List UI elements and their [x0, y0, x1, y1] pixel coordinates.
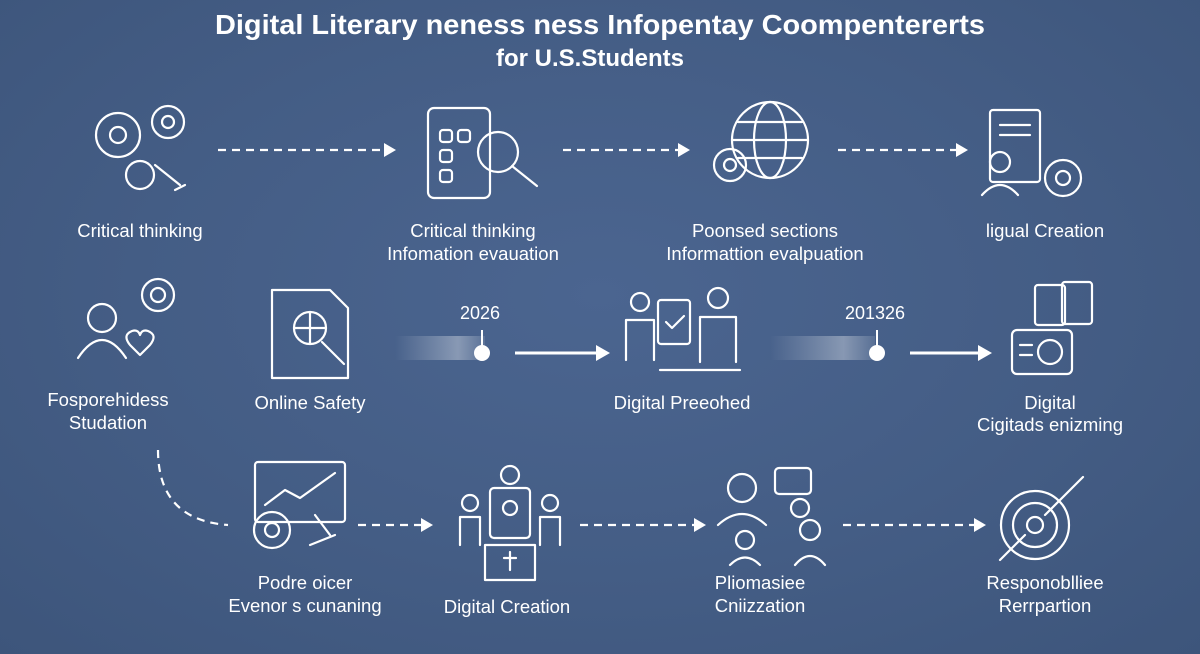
icon: chart gear — [254, 462, 345, 548]
labels: ligual Creation — [986, 220, 1104, 241]
labels: Critical thinking — [77, 220, 203, 241]
arrows dashed — [158, 150, 978, 525]
labels: Informattion evalpuation — [666, 243, 864, 264]
title — [215, 9, 985, 72]
labels: Responoblliee — [986, 572, 1104, 593]
icon: target plug — [1000, 477, 1083, 560]
icon: badge people — [460, 466, 560, 580]
timeline row 2 — [395, 303, 992, 361]
labels: Critical thinking — [410, 220, 536, 241]
title: for U.S.Students — [496, 45, 684, 72]
icon: calculator magnifier — [428, 108, 537, 198]
labels: Cniizzation — [715, 595, 805, 616]
icon: community chat — [718, 468, 825, 565]
labels: Pliomasiee — [715, 572, 805, 593]
labels: Studation — [69, 412, 147, 433]
icon: globe gear — [714, 102, 808, 181]
icon: devices — [1012, 282, 1092, 374]
labels: Poonsed sections — [692, 220, 838, 241]
labels: Evenor s cunaning — [228, 595, 382, 616]
labels: Fosporehidess — [47, 389, 169, 410]
icon: presenters — [626, 288, 740, 370]
labels: Infomation evauation — [387, 243, 559, 264]
labels: Cigitads enizming — [977, 414, 1123, 435]
icon: gears critical thinking — [96, 106, 185, 190]
timeline row 2: 201326 — [845, 303, 905, 323]
title: Digital Literary neness ness Infopentay Coompentererts — [215, 9, 985, 40]
labels: Digital — [1024, 392, 1076, 413]
icon: people heart — [78, 279, 174, 358]
labels: Rerrpartion — [999, 595, 1091, 616]
labels: Podre oicer — [258, 572, 352, 593]
icon: document globe search — [272, 290, 348, 378]
labels: Digital Creation — [444, 596, 570, 617]
labels: Online Safety — [254, 392, 366, 413]
labels — [47, 220, 1123, 617]
timeline row 2: 2026 — [460, 303, 500, 323]
arrowheads — [384, 143, 986, 532]
icon: document person gear — [982, 110, 1081, 196]
labels: Digital Preeohed — [614, 392, 750, 413]
